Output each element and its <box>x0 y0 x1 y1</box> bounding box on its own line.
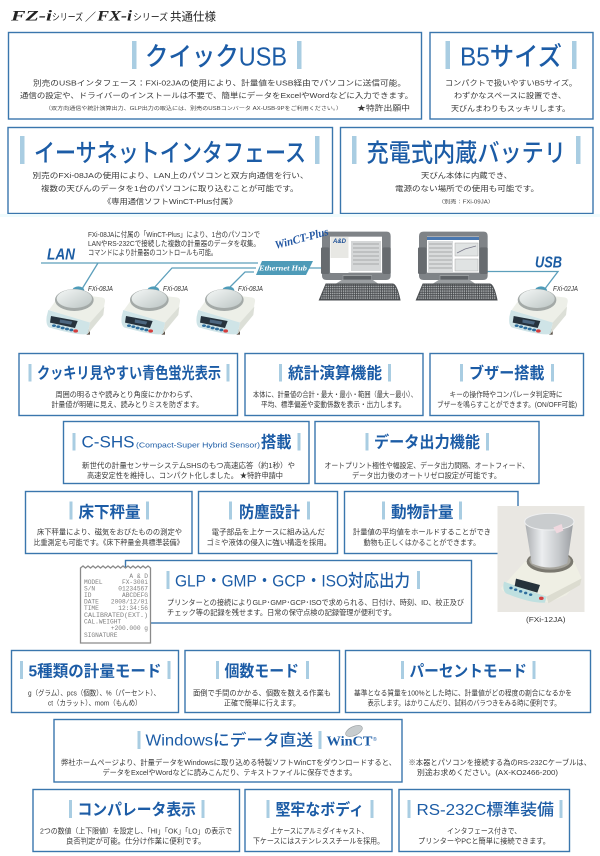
photo: balance with animal weighing cup FXi-12JA <box>498 506 584 612</box>
icon: balance FXi-08JA 1: FXi-08JA <box>88 286 113 293</box>
icon: printout receipt: CAL.WEIGHT <box>84 618 121 626</box>
text <box>253 826 384 846</box>
icon: balance FXi-08JA 3 <box>196 286 263 335</box>
title: 搭載 <box>261 432 292 452</box>
text: B5 description: 天びんまわりもスッキリします。 <box>451 104 570 113</box>
icon: printout receipt: TIME <box>84 605 99 612</box>
title: 充電式内蔵バッテリ: 充電式内蔵バッテリ <box>366 140 566 168</box>
panel: パーセントモード <box>346 650 590 712</box>
text: ゴミや液体の侵入に強い構造を採用。 <box>206 538 331 547</box>
icon: balance FXi-08JA 3: FXi-08JA <box>238 286 263 293</box>
icon: balance FXi-08JA 1 <box>46 286 113 335</box>
panel: クイックUSB <box>8 32 422 119</box>
icon: printout receipt: A & D <box>129 573 148 580</box>
title: 堅牢なボディ <box>276 800 364 819</box>
heading: series title <box>10 8 216 24</box>
text <box>61 758 396 777</box>
text: WinCT-Plus explanation: LANやRS-232Cで接続した複数の計量器のデータを収集。 <box>88 239 260 248</box>
text: プリンターやPCと簡単に接続できます。 <box>418 836 550 846</box>
icon: Ethernet Hub: Ethernet Hub <box>258 264 308 272</box>
text: ct（カラット）、mom（もんめ） <box>48 698 142 708</box>
text: Ethernet description <box>32 171 308 206</box>
text: チェック等の記録を残せます。日常の保守点検の記録管理が便利です。 <box>167 608 396 617</box>
text: battery description: （別売：FXi-09JA） <box>438 198 494 206</box>
icon: printout receipt: ID <box>84 592 92 599</box>
heading: series title: ／ <box>85 10 96 24</box>
panel: 充電式内蔵バッテリ <box>340 128 593 214</box>
icon: printout receipt: SIGNATURE <box>84 632 118 639</box>
text: Ethernet description: 別売のFXi-08JAの使用により、LAN上のパソコンと双方向通信を行い、 <box>32 171 308 180</box>
text: クイックUSB description: 別売のUSBインタフェース：FXi-02JAの使用により、計量値をUSB経由でパソコンに送信可能。 <box>33 78 406 88</box>
text: クイックUSB description <box>20 78 413 112</box>
icon: WinCT logo: WinCT <box>326 734 373 750</box>
text: データをExcelやWordなどに読みこんだり、テキストファイルに保存できます。 <box>102 768 356 777</box>
panel: 統計演算機能 <box>245 354 423 416</box>
text: 周囲の明るさや読みとり角度にかかわらず、 <box>56 390 197 399</box>
icon: balance FXi-08JA 2 <box>121 286 188 335</box>
title: コンパレータ表示 <box>78 801 196 819</box>
text <box>206 528 331 547</box>
text <box>193 688 331 708</box>
icon: printout receipt: FX-300i <box>122 579 148 586</box>
panel: 5種類の計量モード <box>12 650 178 712</box>
text: 正確で簡単に行えます。 <box>224 698 300 708</box>
text <box>324 461 529 480</box>
caption: FXi-12JA: (FXi-12JA) <box>526 615 566 624</box>
panel: RS-232C標準装備 <box>399 790 570 852</box>
text: 動物も正しくはかることができます。 <box>364 538 480 547</box>
text: WinCT-Plus explanation: FXi-08JAに付属の「WinCT-Plus」により、1台のパソコンで <box>88 230 260 239</box>
text <box>82 461 295 480</box>
text: 床下秤量により、磁気をおびたものの測定や <box>37 528 182 536</box>
panel: C-SHS搭載 <box>64 422 309 484</box>
text: 下ケースにはステンレススチールを採用。 <box>253 836 384 846</box>
text <box>167 598 465 617</box>
icon: balance FXi-08JA 2: FXi-08JA <box>163 286 188 293</box>
text: B5 description <box>445 78 577 113</box>
text: ブザーを鳴らすことができます。(ON/OFF可能) <box>437 400 577 409</box>
label: WinCT-Plus: WinCT-Plus <box>274 226 330 252</box>
panel: イーサネットインタフェース <box>8 128 332 214</box>
panel: コンパレータ表示 <box>33 790 240 852</box>
panel: 動物計量 <box>344 492 518 554</box>
icon: WinCT logo <box>326 723 377 750</box>
text: 計量値の平均値をホールドすることができ <box>353 528 491 536</box>
title: 5種類の計量モード <box>28 662 162 680</box>
icon: printout receipt: 01234567 <box>118 586 148 592</box>
text: クイックUSB description: ★特許出願中 <box>357 104 410 112</box>
title: 床下秤量 <box>78 504 140 522</box>
diagram: LAN and USB network <box>0 214 600 335</box>
icon: printout receipt: S/N <box>84 586 95 592</box>
text: 上ケースにアルミダイキャスト、 <box>270 826 368 836</box>
title: ブザー搭載 <box>469 364 544 382</box>
heading: series title: FZ-i <box>10 8 53 24</box>
title: イーサネットインタフェース: イーサネットインタフェース <box>34 140 306 168</box>
title: GLP・GMP・GCP・ISO対応出力 <box>175 572 410 590</box>
text: battery description <box>395 171 539 206</box>
text: インタフェース付きで、 <box>447 826 521 836</box>
icon: balance FXi-02JA: FXi-02JA <box>553 286 578 293</box>
panel: B5サイズ <box>430 32 593 119</box>
text <box>34 528 184 547</box>
text: クイックUSB description: 通信の設定や、ドライバーのインストールは不要で、簡単にデータをExcelやWordなどに入力できます。 <box>20 91 413 100</box>
heading: series title: 共通仕様 <box>170 10 216 24</box>
icon: printout receipt: 12:34:56 <box>118 605 148 612</box>
text: データ出力後のオートリゼロ設定が可能です。 <box>352 471 501 480</box>
text: 高速安定性を維持し、コンパクト化しました。 ★特許申請中 <box>87 471 283 480</box>
title: RS-232C標準装備 <box>416 801 554 819</box>
title: 個数モード <box>224 662 299 680</box>
text: 面倒で手間のかかる、個数を数える作業も <box>193 688 331 698</box>
text: Ethernet description: 《専用通信ソフトWinCT-Plus付属》 <box>103 197 237 206</box>
text: g（グラム）、pcs（個数）、%（パーセント）、 <box>28 688 160 698</box>
text: 弊社ホームページより、計量データをWindowsに取り込める特製ソフトWinCTをダウンロードすると、 <box>61 758 396 767</box>
text: 計量値が明確に見え、読みとりミスを防ぎます。 <box>52 400 203 409</box>
text: 基準となる質量を100%とした時に、計量値がどの程度の割合になるかを <box>354 688 572 698</box>
text: B5 description: わずかなスペースに設置でき、 <box>454 91 566 100</box>
text: battery description: 天びん本体に内蔵でき、 <box>421 171 512 180</box>
title: 統計演算機能 <box>288 364 382 382</box>
text: キーの操作時やコンパレータ判定時に <box>450 390 562 399</box>
label: A&D logo: A&D <box>332 239 347 245</box>
text: クイックUSB description: （双方向通信や統計演算出力、GLP出力の取込には、別売のUSBコンバータ AX-USB-9Pをご利用ください。） <box>45 105 342 112</box>
icon: printout receipt <box>80 566 150 643</box>
icon: balance FXi-02JA <box>509 286 578 335</box>
network lines <box>41 263 558 290</box>
icon: WinCT logo: ® <box>373 736 377 743</box>
label: USB: USB <box>535 254 562 272</box>
title: C-SHS <box>82 432 134 452</box>
title: B5サイズ: B5サイズ <box>460 42 562 72</box>
text: 本体に、計量値の合計・最大・最小・範囲（最大－最小）、 <box>253 390 417 399</box>
heading: series title: シリーズ <box>133 12 168 24</box>
icon: computer with data tables <box>416 232 497 300</box>
text: 良否判定が可能。仕分け作業に便利です。 <box>66 836 206 846</box>
icon: printout receipt: ABCDEFG <box>122 592 148 599</box>
note: RS-232C cable <box>408 758 591 777</box>
title <box>82 432 292 452</box>
text <box>28 688 160 708</box>
text: battery description: 電源のない場所での使用も可能です。 <box>395 184 539 193</box>
panel: データ出力機能 <box>315 422 539 484</box>
label: LAN: LAN <box>47 246 75 264</box>
panel: クッキリ見やすい青色蛍光表示 <box>19 354 238 416</box>
text: プリンターとの接続によりGLP･GMP･GCP･ISOで求められる、日付け、時刻、ID、校正及び <box>167 598 465 607</box>
title: データ出力機能 <box>374 432 480 452</box>
panel: ブザー搭載 <box>430 354 584 416</box>
title: Windowsにデータ直送 <box>146 730 313 750</box>
text: WinCT-Plus explanation <box>88 230 260 257</box>
icon: printout receipt: DATE <box>84 598 99 606</box>
text: WinCT-Plus explanation: コマンドにより計量器のコントロールも可能。 <box>88 248 217 257</box>
text: B5 description: コンパクトで扱いやすいB5サイズ。 <box>445 78 577 88</box>
panel: 床下秤量 <box>26 492 192 554</box>
title: 動物計量 <box>391 504 454 522</box>
panel: 個数モード <box>185 650 340 712</box>
text <box>253 390 417 409</box>
icon: computer with WinCT-Plus <box>319 232 400 300</box>
panel: Windowsにデータ直送 <box>54 720 402 782</box>
text <box>354 688 572 708</box>
text: 表示します。はかりこんだり、試料のバラつきをみる時に便利です。 <box>368 698 560 708</box>
panel: GLP・GMP・GCP・ISO対応出力 <box>126 560 472 623</box>
note: RS-232C cable: 別途お求めください。(AX-KO2466-200) <box>417 768 558 777</box>
title: クッキリ見やすい青色蛍光表示 <box>37 364 221 382</box>
title: クイックUSB: クイックUSB <box>145 42 287 72</box>
text <box>437 390 577 409</box>
heading: series title: FX-i <box>96 8 133 24</box>
text: オートプリント極性や幅設定、データ出力間隔、オートフィード、 <box>324 461 529 470</box>
title: 防塵設計 <box>239 504 300 522</box>
text <box>52 390 203 409</box>
text: Ethernet description: 複数の天びんのデータを1台のパソコンに取り込むことが可能です。 <box>41 184 298 193</box>
title: パーセントモード <box>410 662 527 680</box>
text <box>353 528 491 547</box>
icon: printout receipt: CALIBRATED(EXT.) <box>84 612 148 619</box>
icon: printout receipt: +200.000 g <box>111 625 148 632</box>
text: 比重測定も可能です。《床下秤量金具標準装備》 <box>34 538 184 547</box>
note: RS-232C cable: ※本器とパソコンを接続する為のRS-232Cケーブルは、 <box>408 758 591 767</box>
panel: 堅牢なボディ <box>245 790 392 852</box>
panel: 防塵設計 <box>198 492 338 554</box>
text: 新世代の計量センサーシステムSHSのもつ高速応答（約1秒）や <box>82 461 295 470</box>
text <box>40 826 232 846</box>
text <box>418 826 550 846</box>
text: 電子部品を上ケースに組み込んだ <box>212 528 326 536</box>
heading: series title: シリーズ <box>52 12 83 24</box>
text: 2つの数値（上下限値）を設定し、「HI」「OK」「LO」の表示で <box>40 826 232 836</box>
text: 平均、標準偏差や変動係数を表示・出力します。 <box>261 400 406 409</box>
icon: printout receipt: MODEL <box>84 579 103 586</box>
icon: Ethernet Hub <box>256 261 313 275</box>
title: (Compact-Super Hybrid Sensor) <box>136 440 261 450</box>
icon: printout receipt: 2008/12/01 <box>111 598 148 606</box>
